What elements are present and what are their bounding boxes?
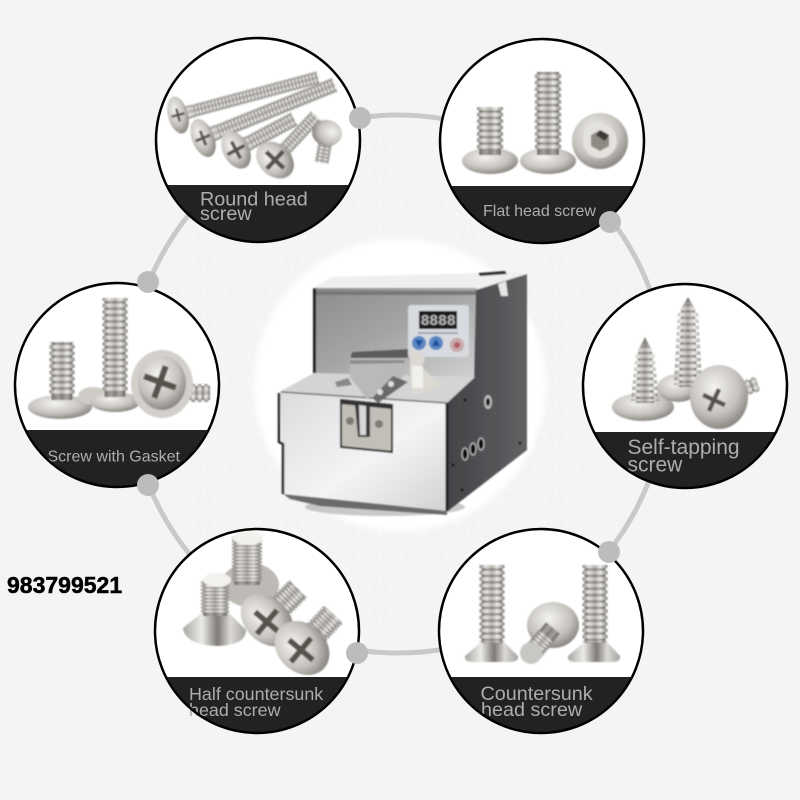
machine top surface xyxy=(313,272,527,290)
panel: round head screw xyxy=(156,38,360,242)
hopper xyxy=(335,343,443,403)
panel: countersunk head screw xyxy=(439,529,644,733)
panel: flat head screw xyxy=(440,39,645,243)
panel: screw with gasket xyxy=(15,283,220,487)
label: Self-tapping xyxy=(628,436,740,459)
label: Half countersunk xyxy=(189,684,323,704)
label: Countersunk xyxy=(480,683,593,705)
photo: gasket screws xyxy=(28,298,210,419)
watermark number: 983799521 xyxy=(7,572,122,598)
ring connector dots xyxy=(137,107,621,664)
photo: flat head screws xyxy=(462,72,628,174)
machine: screw feeder xyxy=(279,271,527,516)
central white disc xyxy=(254,239,546,531)
machine back plate xyxy=(314,288,477,378)
display panel xyxy=(408,305,469,357)
label: Round head xyxy=(200,188,308,210)
label: Screw with Gasket xyxy=(48,448,181,466)
dotted backdrop xyxy=(136,122,660,646)
panel: self-tapping screw xyxy=(583,284,788,489)
slot plate xyxy=(341,399,392,452)
photo: countersunk screws xyxy=(465,565,620,664)
photo: self-tapping screws xyxy=(612,297,760,429)
label: Flat head screw xyxy=(483,203,596,220)
label: screw xyxy=(200,203,252,225)
machine side panel xyxy=(447,274,527,511)
connecting ring xyxy=(129,115,667,653)
photo: half countersunk screws xyxy=(182,531,343,676)
machine shelf xyxy=(279,373,475,403)
label: head screw xyxy=(481,699,583,721)
label: head screw xyxy=(189,700,281,720)
photo: round head screws xyxy=(166,70,342,180)
panel: half countersunk head screw xyxy=(155,529,360,733)
side ports xyxy=(452,395,522,492)
display panel: 8888 xyxy=(421,313,456,330)
label: screw xyxy=(628,454,683,476)
machine front panel xyxy=(280,393,447,511)
